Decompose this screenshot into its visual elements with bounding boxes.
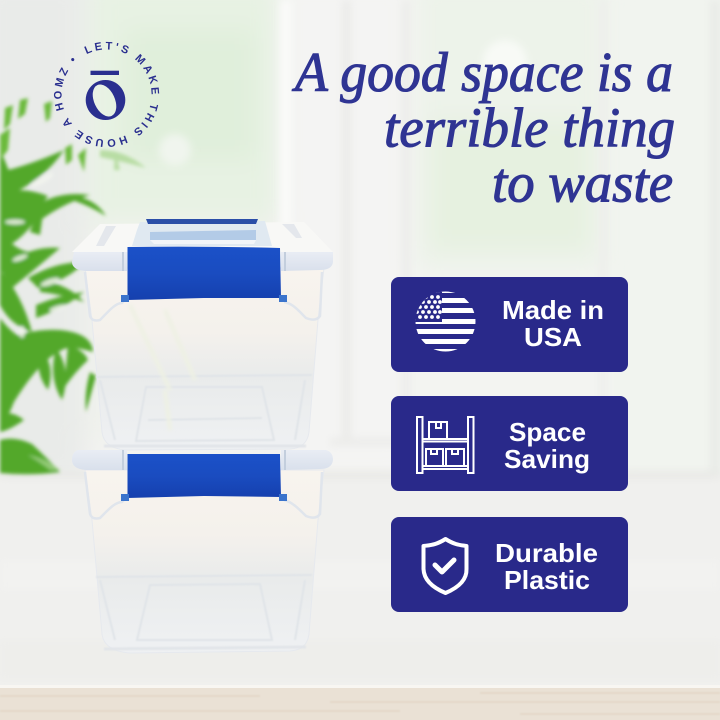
lower lid rim — [72, 450, 127, 470]
title: A good space is a — [291, 42, 673, 104]
badge: circular logo — [54, 42, 160, 147]
panel: Made in USA — [391, 277, 628, 372]
label: Space — [509, 417, 586, 447]
lower container body — [85, 470, 324, 653]
label: Made in — [502, 295, 604, 325]
upper lid rim — [72, 252, 127, 271]
lower blue handle — [128, 454, 281, 498]
lower container — [72, 450, 333, 653]
product: stacked storage containers — [72, 219, 333, 653]
logo ring text: LET'S MAKE THIS HOUSE A HOMZ • — [54, 42, 160, 147]
icon: shield with check — [424, 539, 467, 593]
label: USA — [524, 322, 582, 352]
label: Plastic — [504, 565, 590, 595]
label — [502, 295, 604, 352]
label: Durable — [495, 538, 598, 568]
plant foliage — [0, 98, 146, 474]
title: to waste — [492, 152, 673, 214]
title: terrible thing — [384, 98, 675, 160]
upper lid top — [72, 222, 333, 252]
panel: Durable Plastic — [391, 517, 628, 612]
title — [291, 42, 675, 214]
panel: Space Saving — [391, 396, 628, 491]
table top — [0, 475, 720, 688]
wood edge — [0, 688, 720, 720]
logo mark: o with macron — [86, 71, 125, 120]
upper blue handle — [128, 247, 281, 300]
label — [504, 417, 590, 474]
upper container body — [85, 268, 324, 450]
icon: storage shelf with boxes — [417, 417, 474, 473]
label — [495, 538, 598, 595]
label: Saving — [504, 444, 590, 474]
icon: american flag globe — [415, 291, 476, 352]
upper container — [72, 219, 333, 450]
